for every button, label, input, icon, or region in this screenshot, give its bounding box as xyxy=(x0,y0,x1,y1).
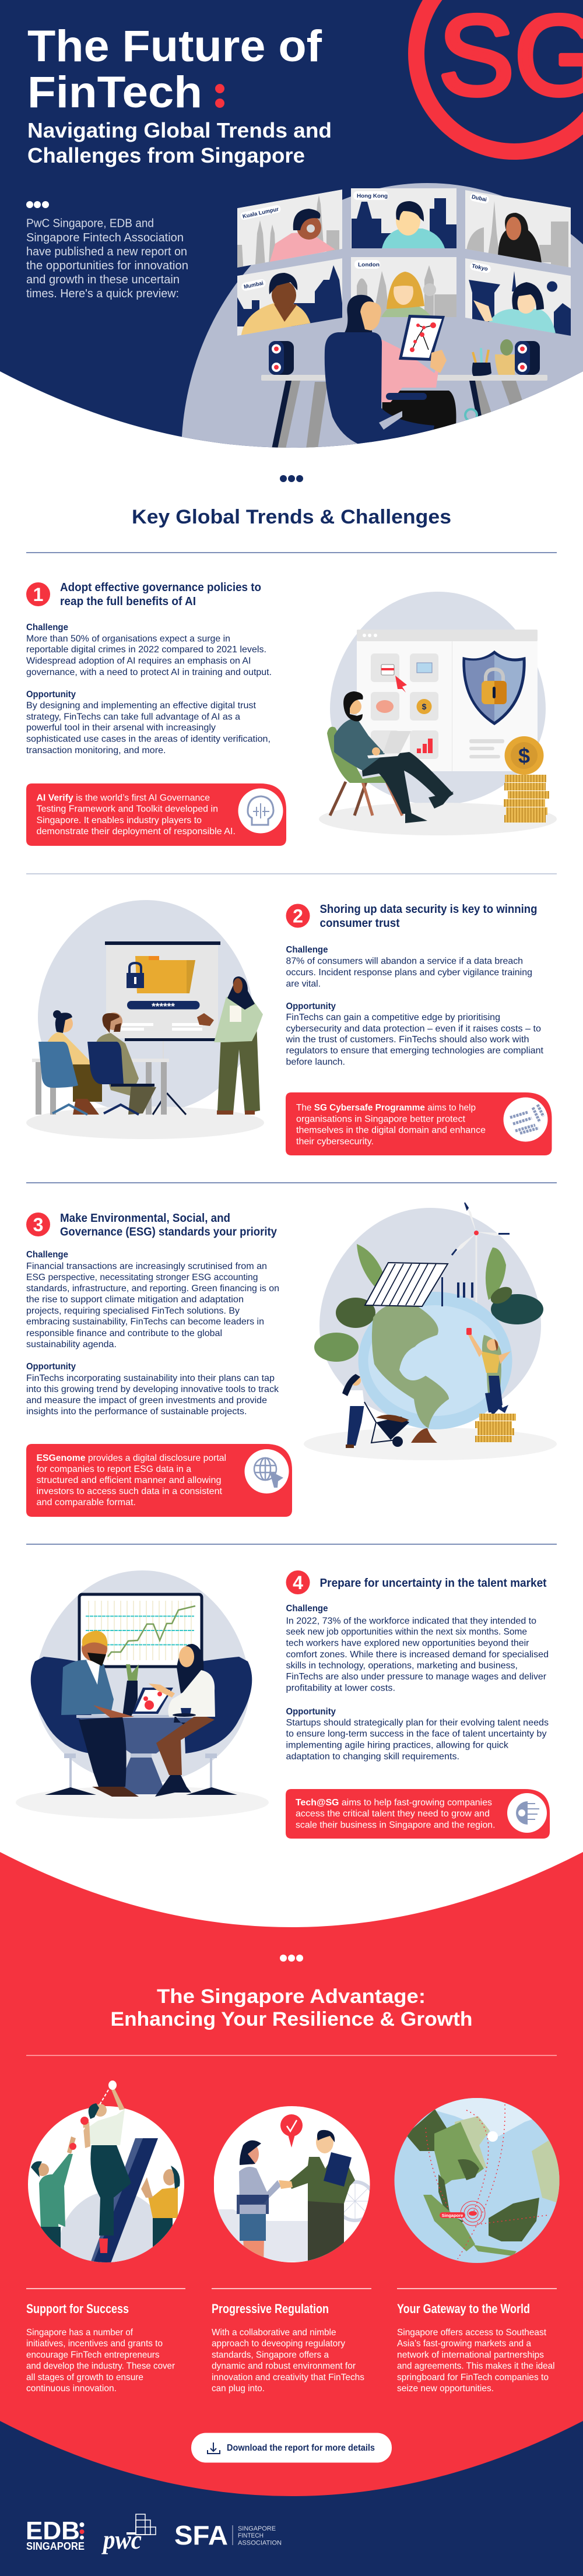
panel: Mumbai xyxy=(237,258,342,338)
challenge text: Financial transactions are increasingly scrutinised from an xyxy=(26,1261,267,1271)
number badge 2: 2 xyxy=(293,906,303,927)
opportunity text: implementing agile hiring practices, allowing for quick xyxy=(286,1741,509,1750)
column: Progressive Regulation: can plug into. xyxy=(212,2384,265,2394)
heading 3 xyxy=(60,1212,278,1238)
column: Progressive Regulation: innovation and creativity that FinTechs xyxy=(212,2373,364,2382)
figure: woman xyxy=(149,1644,215,1797)
label: Singapore pin: Singapore xyxy=(442,2213,463,2218)
intro dots xyxy=(26,201,49,208)
desk items xyxy=(472,339,515,376)
column: Support for Success: and develop the industry. These cover xyxy=(26,2361,175,2371)
column: Your Gateway to the World: Asia’s fast-growing markets and a xyxy=(397,2339,531,2349)
challenge text: More than 50% of organisations expect a surge in xyxy=(26,634,230,644)
title xyxy=(27,22,322,117)
column: Support for Success: Singapore has a number of xyxy=(26,2328,134,2338)
callout: SG Cybersafe Programme xyxy=(286,1092,552,1155)
panel: trend 3 text xyxy=(26,1212,279,1417)
challenge text: Challenge xyxy=(286,945,328,955)
callout: SG Cybersafe Programme: organisations in Singapore better protect xyxy=(296,1115,466,1124)
illustration: support for success xyxy=(28,2081,184,2262)
coins xyxy=(504,736,549,823)
section dots xyxy=(280,1955,303,1962)
heading 2: Shoring up data security is key to winning xyxy=(319,903,538,916)
figure: man on chair with laptop xyxy=(327,691,454,823)
challenge text xyxy=(286,945,532,989)
illustration: ESG globe xyxy=(304,1203,557,1460)
logo: SFA: FINTECH xyxy=(238,2532,264,2539)
column: Your Gateway to the World: springboard for FinTech companies to xyxy=(397,2373,549,2382)
intro text xyxy=(26,217,188,300)
challenge text: occurs. Incident response plans and cyber vigilance training xyxy=(286,968,532,978)
opportunity text: Opportunity xyxy=(26,690,76,700)
left man xyxy=(39,2154,73,2248)
opportunity text: win the trust of customers. FinTechs should also work with xyxy=(285,1035,529,1045)
coins: $ xyxy=(518,744,530,768)
opportunity text: Opportunity xyxy=(26,1362,76,1372)
challenge text: Widespread adoption of AI requires an emphasis on AI xyxy=(26,656,251,666)
number badge 4 xyxy=(286,1570,310,1594)
shield xyxy=(464,652,524,723)
challenge text: profitability at lower costs. xyxy=(286,1684,395,1693)
figure: presenter xyxy=(197,976,263,1115)
callout: ESGenome: investors to access such data in a consistent xyxy=(36,1486,223,1496)
challenge text: comfort zones. While there is increased demand for specialised xyxy=(286,1650,549,1660)
opportunity text xyxy=(285,1001,544,1067)
column: Progressive Regulation xyxy=(212,2288,371,2394)
panel: trend 4 text xyxy=(286,1570,549,1762)
intro text: have published a new report on xyxy=(26,245,187,258)
panel: trend 1 text xyxy=(26,581,272,755)
heading: Singapore Advantage: The Singapore Advantage: xyxy=(157,1985,426,2008)
title: The Future of xyxy=(27,22,322,71)
challenge text xyxy=(26,1250,279,1349)
panel: London: London xyxy=(358,262,380,268)
challenge text: FinTechs are also under pressure to manage wages and deliver xyxy=(286,1672,547,1682)
column: Your Gateway to the World: and agreements. This makes it the ideal xyxy=(397,2361,555,2371)
opportunity text: and measure the impact of green investments and provide xyxy=(26,1396,267,1405)
icon: gear circuit xyxy=(516,1801,539,1825)
logo: SFA xyxy=(174,2520,282,2550)
opportunity text: into this growing trend by developing innovative tools to track xyxy=(26,1384,279,1394)
challenge text: In 2022, 73% of the workforce indicated that they intended to xyxy=(286,1616,536,1626)
column: Your Gateway to the World: network of international partnerships xyxy=(397,2350,544,2360)
logo: SFA: SFA xyxy=(174,2520,228,2550)
challenge text: responsible finance and contribute to the global xyxy=(26,1329,222,1338)
icon: globe cursor xyxy=(254,1458,283,1488)
heading 3: Make Environmental, Social, and xyxy=(60,1212,230,1225)
intro text: the opportunities for innovation xyxy=(26,259,188,272)
column: Support for Success xyxy=(26,2288,185,2394)
column: Your Gateway to the World: Singapore offers access to Southeast xyxy=(397,2328,547,2338)
woman on ladder xyxy=(69,2081,131,2253)
footer background xyxy=(0,2421,583,2576)
figure: seated man xyxy=(87,1013,156,1115)
panel: Hong Kong: Hong Kong xyxy=(357,193,388,199)
heading 3: Governance (ESG) standards your priority xyxy=(60,1225,278,1238)
logo: PwC: pwc xyxy=(101,2525,142,2554)
heading 2 xyxy=(319,903,538,930)
figure: woman with tablet xyxy=(325,295,456,449)
figure: woman with wheelbarrow xyxy=(342,1374,437,1448)
column: Support for Success: encourage FinTech entrepreneurs xyxy=(26,2350,160,2360)
callout: ESGenome: for companies to report ESG data in a xyxy=(36,1464,191,1474)
logo: SFA: ASSOCIATION xyxy=(238,2539,282,2546)
logo: SG ring xyxy=(416,0,583,152)
challenge text: ESG perspective, necessitating stronger ESG accounting xyxy=(26,1273,258,1282)
opportunity text: By designing and implementing an effective digital trust xyxy=(26,701,257,711)
column: Progressive Regulation: approach to deveoping regulatory xyxy=(212,2339,345,2349)
column: Your Gateway to the World xyxy=(397,2288,557,2394)
column: Progressive Regulation: dynamic and robust environment for xyxy=(212,2361,356,2371)
opportunity text: powerful tool in their arsenal with increasingly xyxy=(26,723,216,733)
callout: AI Verify: Testing Framework and Toolkit developed in xyxy=(36,804,218,814)
opportunity text: adaptation to changing skill requirements. xyxy=(286,1752,459,1762)
challenge text: embracing sustainability, FinTechs can become leaders in xyxy=(26,1317,264,1327)
challenge text xyxy=(26,623,272,677)
figure: man in turban xyxy=(61,1630,139,1797)
callout: SG Cybersafe Programme: themselves in the digital domain and enhance xyxy=(296,1125,486,1136)
presentation board xyxy=(105,941,220,1115)
opportunity text: strategy, FinTechs can take full advantage of AI as a xyxy=(26,712,240,722)
opportunity text xyxy=(286,1707,549,1762)
solar panel xyxy=(365,1263,473,1306)
opportunity text: insights into the performance of sustainable projects. xyxy=(26,1407,247,1417)
callout: Tech@SG: Tech@SG aims to help fast-growing companies xyxy=(296,1798,492,1808)
callout: Tech@SG xyxy=(286,1789,550,1839)
callout: ESGenome: structured and efficient manner and allowing xyxy=(36,1475,222,1485)
globe xyxy=(358,1292,512,1429)
opportunity text: Startups should strategically plan for their evolving talent needs xyxy=(286,1718,549,1728)
red section background xyxy=(0,1852,583,2576)
opportunity text: regulators to ensure that emerging technologies are compliant xyxy=(286,1046,544,1056)
wind turbine xyxy=(452,1203,510,1304)
right man xyxy=(148,2187,178,2218)
callout: AI Verify xyxy=(26,783,286,846)
callout: SG Cybersafe Programme: The SG Cybersafe Programme aims to help xyxy=(296,1103,476,1113)
icon: check bubble xyxy=(280,2114,303,2148)
callout: AI Verify: Singapore. It enables industry players to xyxy=(36,816,202,825)
browser window: $ xyxy=(422,702,427,711)
opportunity text: transaction monitoring, and more. xyxy=(26,746,166,755)
subtitle xyxy=(27,118,332,167)
opportunity text: to ensure long-term success in the face of talent uncertainty by xyxy=(286,1729,547,1739)
panel: trend 2 text xyxy=(285,903,544,1067)
figure: man cleaning globe xyxy=(466,1328,511,1414)
armchairs and table xyxy=(31,1657,252,1795)
opportunity text xyxy=(26,690,271,755)
figure: seated woman xyxy=(38,1010,102,1115)
heading: Singapore Advantage xyxy=(111,1985,472,2030)
desk xyxy=(261,375,547,449)
icon: download xyxy=(208,2443,220,2454)
icon: AI head xyxy=(248,796,273,825)
panel: London xyxy=(351,257,456,317)
heading 2: consumer trust xyxy=(319,917,400,930)
panel: Hong Kong xyxy=(351,188,456,248)
subtitle: Navigating Global Trends and xyxy=(27,118,332,142)
presentation board: ****** xyxy=(152,1001,175,1012)
column: Support for Success: continuous innovation. xyxy=(26,2384,117,2394)
logo: PwC xyxy=(101,2514,156,2554)
callout: AI Verify: demonstrate their deployment of responsible AI. xyxy=(36,827,236,837)
label: Singapore pin xyxy=(440,2211,477,2218)
panel: Kuala Lumpur xyxy=(237,189,342,274)
opportunity text: sophisticated use cases in the areas of identity verification, xyxy=(26,735,271,744)
number badge 1: 1 xyxy=(33,584,43,605)
opportunity text xyxy=(26,1362,279,1417)
number badge 3 xyxy=(26,1213,50,1236)
challenge text: projects, requiring specialised FinTech solutions. By xyxy=(26,1306,240,1316)
illustration: progressive regulation xyxy=(214,2106,374,2265)
title: FinTech xyxy=(27,68,202,117)
opportunity text: cybersecurity and data protection – even if it raises costs – to xyxy=(286,1024,541,1034)
button: download report xyxy=(191,2433,392,2462)
number badge 2 xyxy=(286,904,310,928)
challenge text: 87% of consumers will abandon a service if a data breach xyxy=(286,956,523,967)
challenge text: governance, with a need to protect AI in training and output. xyxy=(26,667,272,677)
heading 1: reap the full benefits of AI xyxy=(60,595,196,608)
chart board xyxy=(79,1594,202,1667)
challenge text: Challenge xyxy=(286,1604,328,1614)
callout: Tech@SG: access the critical talent they need to grow and xyxy=(296,1809,490,1819)
intro text: times. Here's a quick preview: xyxy=(26,287,179,300)
challenge text: seek new job opportunities within the next six months. Some xyxy=(286,1627,527,1637)
hero background xyxy=(0,0,583,448)
column: Support for Success: all stages of growth to ensure xyxy=(26,2373,143,2382)
callout: Tech@SG: scale their business in Singapore and the region. xyxy=(296,1820,496,1830)
opportunity text: FinTechs can gain a competitive edge by prioritising xyxy=(286,1013,500,1022)
backdrop blob xyxy=(182,183,583,448)
panel: Dubai: Dubai xyxy=(471,194,487,203)
challenge text: the rise to support climate mitigation and adaptation xyxy=(26,1295,244,1305)
column: Progressive Regulation: Progressive Regulation xyxy=(212,2301,329,2316)
opportunity text: Opportunity xyxy=(286,1707,336,1717)
illustration: video call scene xyxy=(237,188,571,449)
callout: ESGenome: ESGenome provides a digital disclosure portal xyxy=(36,1453,226,1463)
subtitle: Challenges from Singapore xyxy=(27,143,305,167)
number badge 1 xyxy=(26,582,50,606)
panel: Tokyo xyxy=(465,258,571,341)
challenge text: skills in technology, operations, marketing and business, xyxy=(286,1661,518,1671)
challenge text: sustainability agenda. xyxy=(26,1340,117,1349)
section dots xyxy=(280,475,303,482)
column: Progressive Regulation: With a collaborative and nimble xyxy=(212,2328,336,2338)
panel: Mumbai: Mumbai xyxy=(243,280,264,290)
column: Your Gateway to the World: Your Gateway to the World xyxy=(397,2301,530,2316)
man xyxy=(308,2201,344,2265)
challenge text: Challenge xyxy=(26,623,68,632)
callout: AI Verify: AI Verify is the world’s first AI Governance xyxy=(36,793,210,803)
challenge text xyxy=(286,1604,549,1693)
opportunity text: before launch. xyxy=(286,1057,345,1067)
icon: keyboard xyxy=(510,1105,543,1133)
heading: Singapore Advantage: Enhancing Your Resilience & Growth xyxy=(111,2008,472,2030)
column: Support for Success: initiatives, incentives and grants to xyxy=(26,2339,163,2349)
callout: SG Cybersafe Programme: their cybersecurity. xyxy=(296,1137,374,1147)
column: Your Gateway to the World: seize new opportunities. xyxy=(397,2384,494,2394)
challenge text: Challenge xyxy=(26,1250,68,1260)
panel: Dubai xyxy=(465,190,571,268)
heading 1: Adopt effective governance policies to xyxy=(60,581,261,594)
logo: EDB Singapore: SINGAPORE xyxy=(26,2540,85,2552)
logo: EDB Singapore: EDB xyxy=(26,2517,80,2545)
intro text: and growth in these uncertain xyxy=(26,273,180,286)
opportunity text: FinTechs incorporating sustainability into their plans can tap xyxy=(26,1373,275,1383)
speaker left xyxy=(269,341,294,375)
illustration: data security presentation xyxy=(26,900,264,1139)
speaker right xyxy=(515,341,540,375)
callout: ESGenome: and comparable format. xyxy=(36,1498,136,1507)
heading 1 xyxy=(60,581,261,608)
intro text: PwC Singapore, EDB and xyxy=(26,217,154,230)
heading: Key Global Trends & Challenges: Key Global Trends & Challenges xyxy=(132,506,451,528)
browser window xyxy=(357,630,538,771)
challenge text: tech workers have explored new opportunities beyond their xyxy=(286,1638,529,1649)
illustration: talent market meeting xyxy=(16,1570,269,1819)
label: Kuala Lumpur: Kuala Lumpur xyxy=(242,206,279,220)
illustration: gateway map xyxy=(394,2098,560,2264)
number badge 4: 4 xyxy=(293,1572,303,1593)
woman xyxy=(243,2241,264,2257)
leaves xyxy=(314,1244,543,1362)
button: download report: Download the report for more details xyxy=(227,2443,375,2453)
table xyxy=(32,1059,169,1115)
illustration: governance and security xyxy=(319,592,557,835)
column: Support for Success: Support for Success xyxy=(26,2301,129,2316)
number badge 3: 3 xyxy=(33,1214,43,1235)
intro text: Singapore Fintech Association xyxy=(26,231,184,244)
challenge text: reportable digital crimes in 2022 compared to 2021 levels. xyxy=(26,645,266,655)
coins xyxy=(475,1414,516,1442)
logo: SFA: SINGAPORE xyxy=(238,2525,276,2532)
panel: Tokyo: Tokyo xyxy=(471,263,489,273)
heading 4: Prepare for uncertainty in the talent market xyxy=(319,1577,547,1590)
challenge text: standards, infrastructure, and reporting. Green financing is on xyxy=(26,1284,279,1294)
challenge text: are vital. xyxy=(286,979,321,989)
opportunity text: Opportunity xyxy=(286,1001,336,1011)
callout: ESGenome xyxy=(26,1444,292,1517)
column: Progressive Regulation: standards, Singapore offers a xyxy=(212,2350,329,2360)
